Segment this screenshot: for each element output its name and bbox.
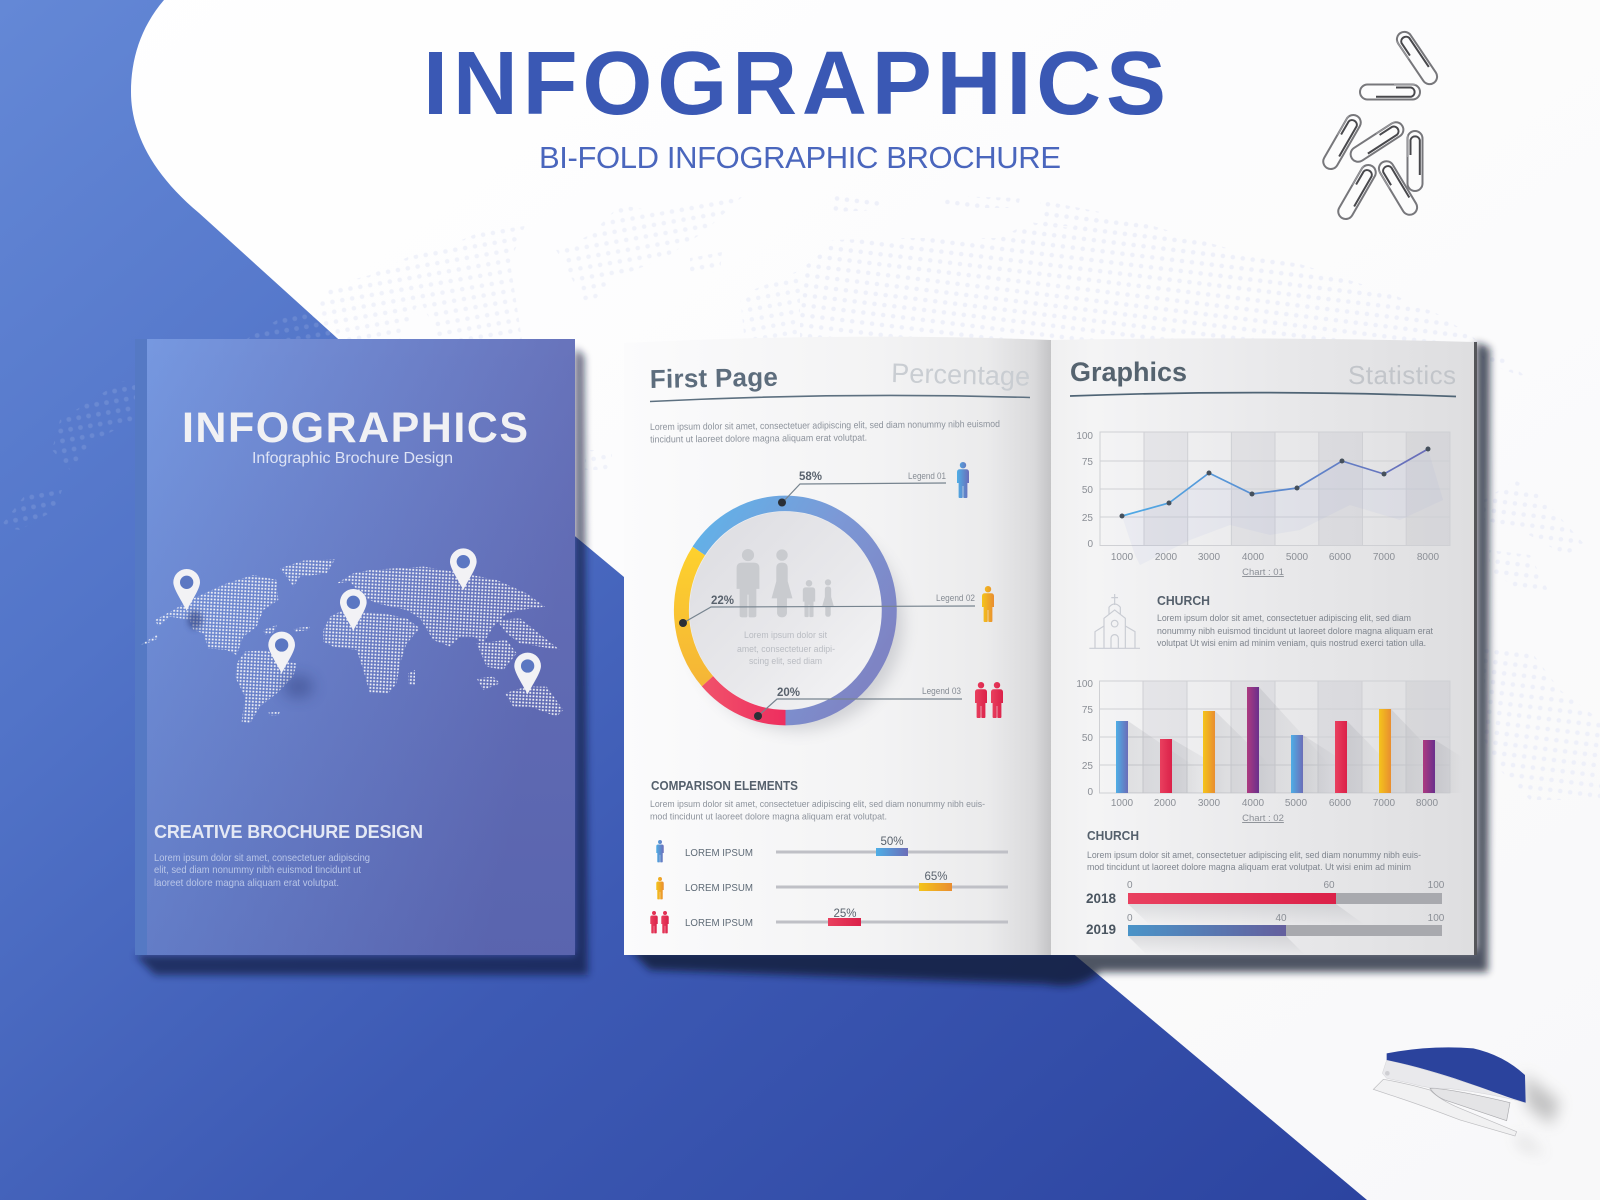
- icon: paper clips: [1321, 29, 1440, 222]
- line chart: 7000: [1373, 552, 1396, 563]
- bar chart: 5000: [1285, 798, 1308, 809]
- comparison row 3: [650, 908, 1008, 933]
- bar shadows: [1128, 687, 1462, 793]
- cover body text: elit, sed diam nonummy nibh euismod tincidunt ut: [154, 864, 361, 876]
- church text block 2: CHURCH: [1087, 828, 1139, 843]
- line chart: 50: [1082, 485, 1093, 496]
- bar chart: [1076, 679, 1462, 824]
- comparison row 3: 25%: [833, 908, 857, 920]
- line chart: 6000: [1329, 552, 1352, 563]
- progress bar: 2018: [1086, 880, 1445, 925]
- progress bar: 2019: [1086, 913, 1445, 955]
- comparison text: [650, 799, 985, 822]
- comparison row 1: [656, 836, 1008, 862]
- donut chart: [681, 503, 903, 730]
- church text block 2: Lorem ipsum dolor sit amet, consectetuer adipiscing elit, sed diam nonummy nibh euis-: [1087, 850, 1421, 861]
- bar chart: Chart : 02: [1242, 813, 1284, 824]
- bar chart: 4000: [1242, 798, 1265, 809]
- panel: brochure cover: [135, 339, 588, 975]
- heading: Statistics: Statistics: [1348, 360, 1456, 390]
- church text block 2: mod tincidunt ut laoreet dolore magna aliquam erat volutpat. Ut wisi enim ad minim: [1087, 862, 1411, 873]
- heading: Graphics: Graphics: [1070, 357, 1187, 387]
- church text block 1: volutpat Ut wisi enim ad minim veniam, quis nostrud exerci tation ulla.: [1157, 638, 1426, 649]
- title: INFOGRAPHICS: [423, 34, 1166, 134]
- callout: legend 02: Legend 02: [936, 593, 975, 604]
- callout: legend 01: [778, 462, 969, 506]
- progress bar: 2018: 0: [1127, 880, 1133, 891]
- progress bar: 2019: 2019: [1086, 922, 1116, 937]
- donut centre text: Lorem ipsum dolor sit: [744, 630, 827, 641]
- bar chart: 8000: [1416, 798, 1439, 809]
- progress bar: 2019: 100: [1428, 913, 1445, 924]
- line chart: 5000: [1286, 552, 1309, 563]
- line chart: 4000: [1242, 552, 1265, 563]
- panel: left brochure page: [624, 337, 1051, 955]
- bar chart: 2000: [1154, 798, 1177, 809]
- line chart: Chart : 01: [1242, 567, 1284, 578]
- callout: legend 03: 20%: [777, 687, 800, 699]
- intro text: [650, 419, 1000, 445]
- map pins: [173, 548, 541, 694]
- donut centre text: amet, consectetuer adipi-: [737, 644, 835, 655]
- comparison row 2: LOREM IPSUM: [685, 882, 753, 894]
- callout: legend 02: 22%: [711, 595, 734, 607]
- bar chart: 3000: [1198, 798, 1221, 809]
- church text block 2: [1087, 828, 1421, 873]
- cover title: INFOGRAPHICS: [182, 404, 528, 452]
- subtitle: BI-FOLD INFOGRAPHIC BROCHURE: [539, 140, 1061, 175]
- comparison text: Lorem ipsum dolor sit amet, consectetuer adipiscing elit, sed diam nonummy nibh euis-: [650, 799, 985, 810]
- bar chart: 100: [1076, 679, 1093, 690]
- comparison row 3: LOREM IPSUM: [685, 917, 753, 929]
- progress bar: 2019: 40: [1275, 913, 1287, 924]
- line chart: 3000: [1198, 552, 1221, 563]
- donut centre text: [737, 630, 835, 667]
- church text block 1: [1157, 593, 1433, 649]
- line chart: 2000: [1155, 552, 1178, 563]
- comparison row 1: 50%: [880, 836, 904, 848]
- bar chart: 50: [1082, 733, 1093, 744]
- church text block 1: nonummy nibh euismod tincidunt ut laoreet dolore magna aliquam erat: [1157, 626, 1433, 637]
- bar chart: 0: [1087, 787, 1093, 798]
- cover body text: laoreet dolore magna aliquam erat volutpat.: [154, 877, 339, 889]
- progress bar: 2018: 2018: [1086, 891, 1117, 906]
- progress bar: 2019: 0: [1127, 913, 1133, 924]
- bar chart: 7000: [1373, 798, 1396, 809]
- cover heading: CREATIVE BROCHURE DESIGN: [154, 822, 423, 842]
- cover body text: [154, 852, 370, 889]
- heading: Percentage: Percentage: [891, 358, 1031, 392]
- line chart: 0: [1087, 539, 1093, 550]
- line chart: 1000: [1111, 552, 1134, 563]
- cover body text: Lorem ipsum dolor sit amet, consectetuer adipiscing: [154, 852, 370, 864]
- line chart: 75: [1082, 457, 1093, 468]
- family icons: [737, 549, 834, 617]
- panel: right brochure page: [1051, 338, 1477, 955]
- cover spine: [135, 339, 147, 955]
- comparison row 1: LOREM IPSUM: [685, 847, 753, 859]
- heading: First Page: First Page: [650, 362, 778, 394]
- line chart: [1076, 431, 1450, 578]
- donut centre text: scing elit, sed diam: [749, 656, 822, 667]
- comparison text: mod tincidunt ut laoreet dolore magna aliquam erat volutpat.: [650, 812, 887, 822]
- intro text: Lorem ipsum dolor sit amet, consectetuer adipiscing elit, sed diam nonummy nibh euismod: [650, 419, 1000, 433]
- brochure drop shadow: [630, 342, 1490, 986]
- callout: legend 01: Legend 01: [908, 471, 946, 482]
- line chart: 8000: [1417, 552, 1440, 563]
- callout: legend 03: Legend 03: [922, 686, 961, 697]
- comparison row 2: 65%: [924, 871, 948, 883]
- progress bar: 2018: 100: [1428, 880, 1445, 891]
- callout: legend 03: [754, 682, 1003, 720]
- bar chart: 75: [1082, 705, 1093, 716]
- church text block 1: Lorem ipsum dolor sit amet, consectetuer adipiscing elit, sed diam: [1157, 613, 1411, 624]
- comparison row 2: [656, 871, 1008, 899]
- bar chart: 6000: [1329, 798, 1352, 809]
- line chart: 25: [1082, 513, 1093, 524]
- bar chart: 1000: [1111, 798, 1134, 809]
- icon: stapler: [1373, 1047, 1560, 1155]
- intro text: tincidunt ut laoreet dolore magna aliquam erat volutpat.: [650, 433, 867, 445]
- background map dots on blue: [0, 310, 337, 530]
- bar chart: 25: [1082, 761, 1093, 772]
- background dotted world map: [316, 196, 1600, 800]
- church text block 1: CHURCH: [1157, 593, 1210, 608]
- line chart: 100: [1076, 431, 1093, 442]
- cover subtitle: Infographic Brochure Design: [252, 450, 453, 467]
- callout: legend 01: 58%: [799, 471, 822, 483]
- icon: church: [1089, 594, 1140, 648]
- callout: legend 02: [679, 586, 994, 627]
- heading: comparison elements: COMPARISON ELEMENTS: [651, 778, 798, 793]
- cover dotted world map: [140, 548, 563, 723]
- progress bar: 2018: 60: [1323, 880, 1335, 891]
